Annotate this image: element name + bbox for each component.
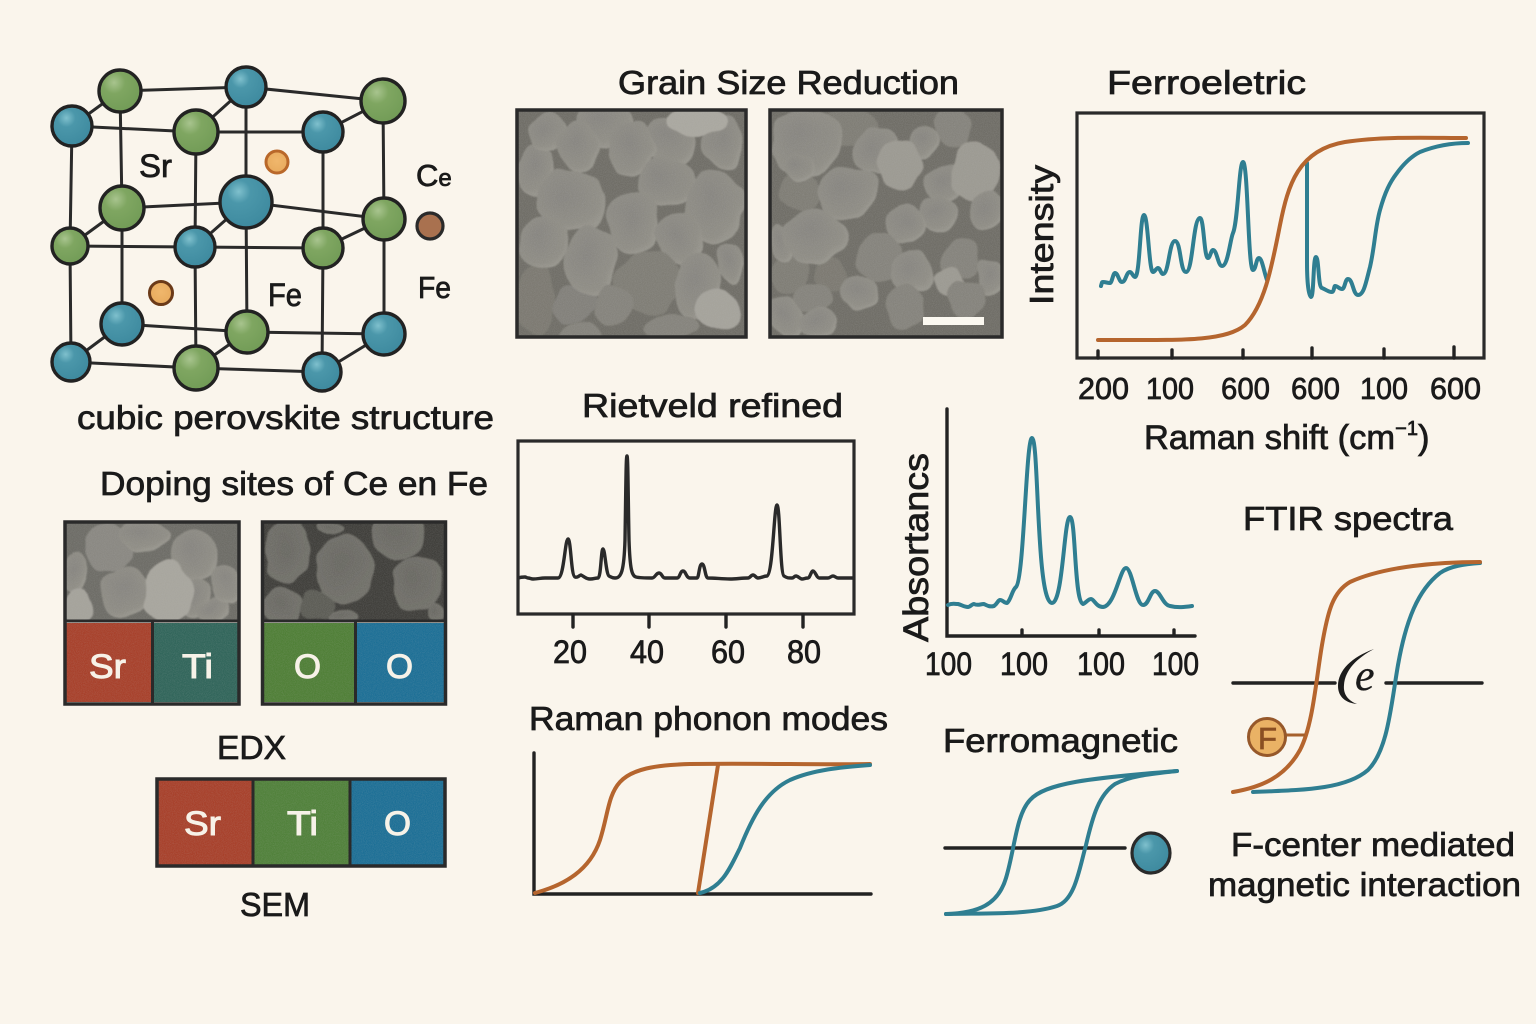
caption: magnetic interaction: magnetic interaction bbox=[1208, 866, 1521, 903]
heading: Doping sites: Doping sites of Ce en Fe bbox=[100, 465, 488, 502]
atoms: back top row bbox=[99, 67, 405, 123]
teal spectrum left bbox=[1101, 162, 1267, 286]
dopant atom: legend bbox=[417, 213, 443, 239]
x-axis tick labels: absorbance: 100 bbox=[925, 646, 972, 682]
orange branch bbox=[1233, 562, 1480, 792]
crescent mark bbox=[1338, 649, 1374, 704]
atoms: front bottom row bbox=[52, 343, 341, 391]
field axis left bbox=[1233, 681, 1335, 685]
chart frame bbox=[518, 441, 854, 614]
tile label: Ti: Ti bbox=[182, 648, 213, 686]
tile: O bbox=[351, 779, 445, 866]
orange vertical link bbox=[698, 765, 718, 893]
x-axis tick labels: Raman: 600 bbox=[1291, 371, 1340, 406]
heading: Raman phonon modes: Raman phonon modes bbox=[529, 700, 888, 737]
teal rising curve bbox=[700, 765, 870, 893]
panel: SEM micrograph reduced grains bbox=[770, 110, 1002, 337]
chart: Raman phonon modes curves bbox=[534, 753, 871, 894]
tile: Sr bbox=[66, 623, 152, 702]
chart: ferromagnetic hysteresis loop bbox=[945, 771, 1177, 914]
heading: Ferromagnetic: Ferromagnetic bbox=[943, 722, 1178, 759]
x-axis tick labels: Rietveld: 60 bbox=[711, 634, 745, 670]
strip label: O: O bbox=[384, 805, 411, 843]
tile label: O: O bbox=[294, 648, 321, 686]
x-axis tick labels: Rietveld: 40 bbox=[630, 634, 664, 670]
label: Fe outer: Fe bbox=[418, 270, 451, 305]
tile label: Sr: Sr bbox=[89, 648, 126, 686]
x-axis ticks bbox=[1098, 347, 1454, 358]
y-axis label: Intensity: Intensity bbox=[1023, 164, 1060, 305]
x-axis title: Raman shift: −1 bbox=[1395, 418, 1418, 440]
tile: Ti bbox=[153, 623, 238, 702]
x-axis tick labels: Raman: 600 bbox=[1430, 371, 1481, 406]
icon: teal sphere bbox=[1132, 833, 1170, 873]
x-axis title: Raman shift: ) bbox=[1418, 419, 1429, 457]
dopant atom: upper bbox=[266, 151, 288, 173]
x-axis tick labels: Raman: 100 bbox=[1360, 371, 1408, 406]
chart: Raman intensity and ferroelectric curve bbox=[1077, 113, 1484, 358]
x-axis tick labels: Raman: 600 bbox=[1221, 371, 1270, 406]
tile label: O: O bbox=[386, 648, 413, 686]
tile: O green bbox=[264, 623, 355, 702]
icon: F-center marker: F bbox=[1258, 721, 1277, 756]
label: Ce: Ce bbox=[416, 158, 452, 193]
caption: SEM: SEM bbox=[240, 886, 310, 923]
panel: EDX map Sr Ti bbox=[64, 522, 240, 704]
atoms: back bottom row bbox=[101, 303, 405, 355]
tile: O blue bbox=[356, 623, 444, 702]
label: Sr: Sr bbox=[139, 148, 172, 184]
teal absorbance trace bbox=[948, 438, 1192, 607]
orange hysteresis curve bbox=[1098, 138, 1466, 340]
x-axis tick labels: absorbance: 100 bbox=[1077, 646, 1125, 682]
heading: Ferroeletric: Ferroeletric bbox=[1107, 64, 1306, 101]
heading: Rietveld refined: Rietveld refined bbox=[582, 387, 843, 424]
orange rising curve bbox=[535, 764, 870, 893]
x-axis ticks bbox=[573, 615, 803, 627]
lattice bonds bbox=[70, 87, 384, 372]
teal left branch bbox=[946, 771, 1177, 914]
x-axis title: Raman shift: Raman shift (cm bbox=[1144, 419, 1395, 457]
atoms: back middle row bbox=[100, 176, 405, 240]
panel: SEM micrograph large grains bbox=[517, 101, 746, 343]
teal branch bbox=[1253, 563, 1480, 792]
heading: Grain Size Reduction: Grain Size Reduction bbox=[618, 64, 959, 101]
chart frame bbox=[1077, 113, 1484, 358]
chart: Rietveld XRD pattern bbox=[518, 441, 854, 627]
caption: EDX: EDX bbox=[217, 729, 286, 766]
field axis bbox=[945, 846, 1125, 850]
caption: cubic perovskite structure: cubic perovskite structure bbox=[77, 399, 494, 436]
panel: SEM element strip bbox=[157, 779, 445, 866]
x-axis tick labels: absorbance bbox=[925, 646, 1199, 682]
dopant atom: lower bbox=[150, 282, 172, 304]
axes bbox=[947, 409, 1195, 636]
atoms: front middle row bbox=[52, 227, 343, 268]
tile: Sr bbox=[157, 779, 253, 866]
panel: cubic perovskite crystal lattice bbox=[52, 67, 452, 391]
y-axis label: Absortancs: Absortancs bbox=[897, 453, 936, 642]
chart: F-center hysteresis loop bbox=[1233, 562, 1482, 792]
teal spectrum right bbox=[1307, 143, 1468, 297]
heading: FTIR spectra: FTIR spectra bbox=[1243, 500, 1454, 537]
symbol: e: e bbox=[1355, 651, 1375, 700]
x-axis tick labels: Rietveld: 20 bbox=[553, 634, 587, 670]
x-axis tick labels: absorbance: 100 bbox=[1152, 646, 1199, 682]
caption: F-center mediated: F-center mediated bbox=[1231, 826, 1515, 863]
diffraction trace bbox=[518, 456, 853, 579]
x-axis tick labels: Raman: 200 bbox=[1078, 371, 1129, 406]
atoms: front top row bbox=[52, 106, 343, 154]
teal right branch bbox=[946, 771, 1177, 914]
tile: Ti bbox=[254, 779, 350, 866]
icon: F-center marker bbox=[1248, 718, 1305, 756]
panel: EDX map O O bbox=[262, 514, 446, 704]
field axis right bbox=[1386, 681, 1482, 685]
label: Fe inner: Fe bbox=[268, 277, 302, 313]
x-axis tick labels: Rietveld bbox=[553, 634, 821, 670]
x-axis tick labels: Rietveld: 80 bbox=[787, 634, 821, 670]
x-axis tick labels: Raman: 100 bbox=[1146, 371, 1194, 406]
strip label: Ti: Ti bbox=[287, 805, 318, 843]
chart: absorbance spectrum bbox=[947, 409, 1195, 636]
scale bar bbox=[923, 317, 984, 325]
strip label: Sr: Sr bbox=[184, 805, 221, 843]
axes bbox=[534, 753, 871, 894]
x-axis tick labels: Raman bbox=[1078, 371, 1481, 406]
x-axis tick labels: absorbance: 100 bbox=[1000, 646, 1048, 682]
